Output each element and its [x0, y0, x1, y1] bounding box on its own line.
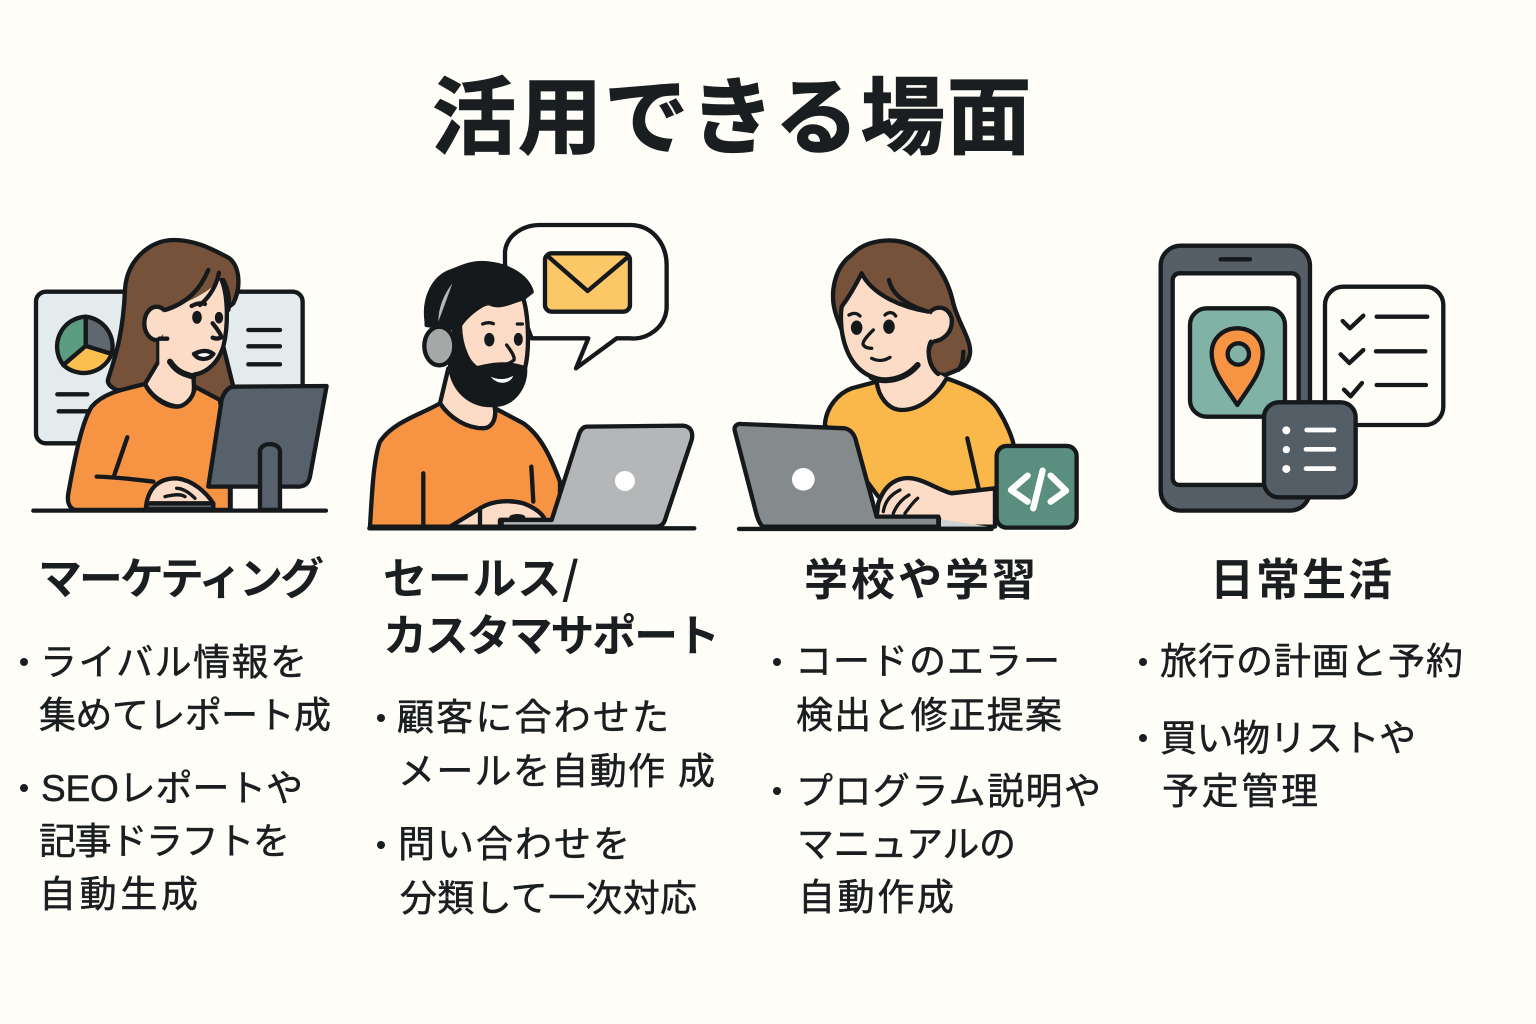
heading: marketing: マーケティング [38, 543, 324, 607]
list: school items: プログラム説明や [796, 771, 1101, 812]
list: school items: 自動作成 [798, 877, 954, 918]
list: marketing items: 集めてレポート成 [39, 695, 331, 736]
icon: code brackets [997, 446, 1077, 528]
list: marketing items: SEOレポートや [41, 768, 303, 809]
heading: sales and customer support: セールス/ [383, 543, 579, 607]
list: daily life items: 予定管理 [1162, 771, 1318, 812]
panel: school and learning [735, 241, 1101, 918]
panel: sales and customer support [369, 225, 720, 919]
illustration: woman at monitor with charts [33, 240, 327, 511]
title: 活用できる場面 [432, 71, 1031, 165]
panel: marketing [20, 240, 331, 915]
list: sales items [377, 697, 715, 919]
list: sales items: 問い合わせを [398, 824, 630, 865]
list: daily life items: 買い物リストや [1160, 718, 1416, 759]
heading: sales and customer support: カスタマサポート [383, 600, 720, 664]
list: sales items: 顧客に合わせた [397, 697, 669, 738]
list: sales items: 分類して一次対応 [400, 878, 697, 919]
heading: daily life: 日常生活 [1210, 544, 1392, 608]
list: daily life items: 旅行の計画と予約 [1160, 641, 1463, 682]
panel: daily life [1139, 246, 1463, 812]
list: marketing items: 自動生成 [39, 874, 198, 915]
heading: sales and customer support [383, 543, 720, 664]
illustration: woman with laptop and code icon [735, 241, 1077, 529]
list: school items: 検出と修正提案 [796, 695, 1062, 736]
list: marketing items: 記事ドラフトを [39, 821, 290, 862]
list: school items: マニュアルの [797, 824, 1016, 865]
list: daily life items [1139, 641, 1463, 812]
illustration: phone, map pin and checklist [1161, 246, 1443, 511]
illustration: man with headset and laptop [369, 225, 694, 528]
list: marketing items: ライバル情報を [40, 642, 307, 683]
heading: school and learning: 学校や学習 [804, 544, 1036, 608]
list: school items: コードのエラー [795, 641, 1060, 682]
list: sales items: メールを自動作 成 [398, 751, 715, 792]
list: marketing items [20, 642, 331, 915]
list: school items [773, 641, 1101, 918]
